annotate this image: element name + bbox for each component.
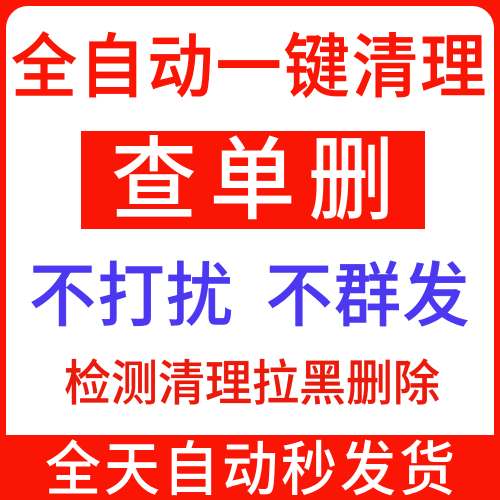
title: 全自动一键清理 (11, 28, 488, 105)
banner heading: 查单删 (111, 131, 406, 232)
banner: red block with product name (81, 131, 425, 229)
feature text: no disturbance, no mass messaging: 不打扰 不群发 (29, 258, 471, 336)
description text: 检测清理拉黑删除 (64, 356, 440, 410)
